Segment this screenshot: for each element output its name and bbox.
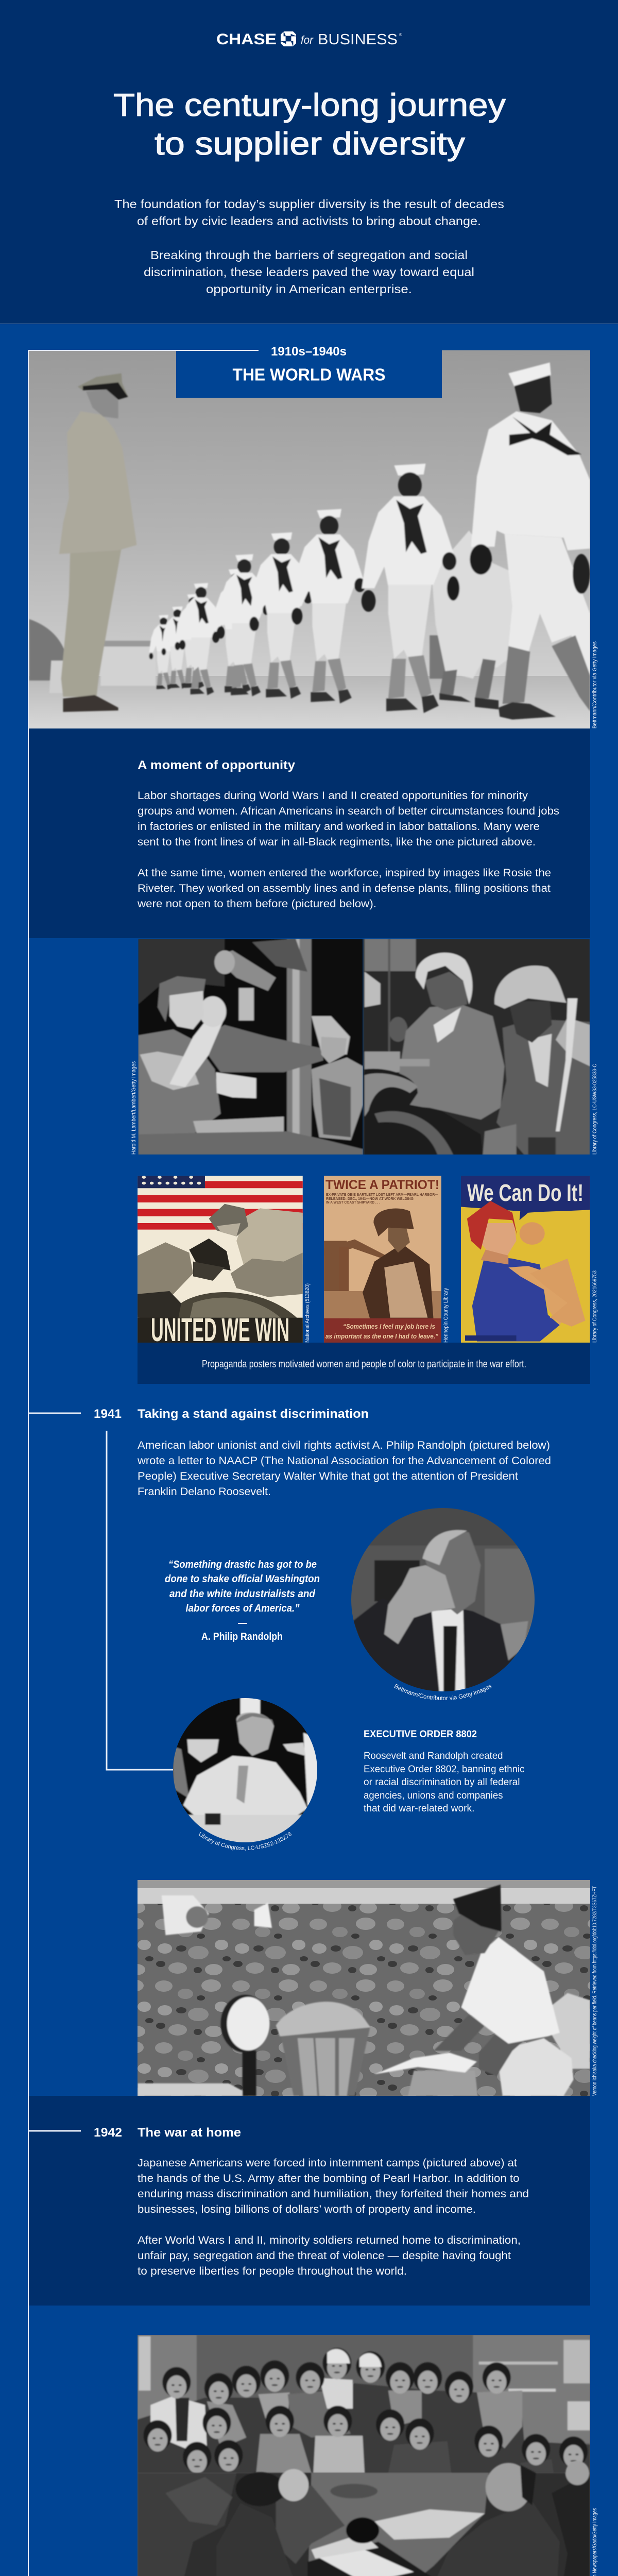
body text: sent to the front lines of war in all-Black regiments, like the one pictured above. [138, 836, 536, 848]
poster: Twice a Patriot [324, 1176, 441, 1343]
body text: 1942: businesses, losing billions of dollars’ worth of property and income. [138, 2204, 476, 2215]
intro text [114, 197, 504, 296]
logo: Chase for Business: ® [399, 32, 402, 37]
quote: Randolph: A. Philip Randolph [201, 1631, 283, 1642]
basket [280, 2025, 370, 2096]
year: 1942: 1942 [94, 2126, 122, 2140]
header panel [0, 0, 618, 324]
credit: farm photo: Vernon Ichisaka checking weight of beans per field. Retrieved from https://doi.org/doi:10.7282/T3S67ZHFT [592, 1886, 598, 2096]
poster text: Twice a Patriot: IN A WEST COAST SHIPYARD . . . [326, 1200, 380, 1205]
intro text: The foundation for today’s supplier diversity is the result of decades [114, 197, 504, 211]
intro text: of effort by civic leaders and activists to bring about change. [137, 214, 481, 228]
intro text: opportunity in American enterprise. [206, 282, 412, 296]
body text: Riveter. They worked on assembly lines and in defense plants, filling positions that [138, 883, 551, 894]
caption panel: propaganda posters: Propaganda posters motivated women and people of color to participate in the war effort. [202, 1359, 526, 1370]
body text: 1942: After World Wars I and II, minority soldiers returned home to discrimination, [138, 2234, 521, 2246]
body text: 1942: the hands of the U.S. Army after the bombing of Pearl Harbor. In addition to [138, 2173, 519, 2184]
body text: groups and women. African Americans in search of better circumstances found jobs [138, 805, 559, 817]
quote: Randolph: labor forces of America.” [185, 1603, 300, 1614]
photo: President Roosevelt signing [169, 1695, 321, 1846]
connector line to FDR photo [107, 1431, 174, 1770]
man [496, 2038, 574, 2096]
photo: sailors marching [29, 350, 590, 728]
text block: Executive Order 8802: EXECUTIVE ORDER 8802 [364, 1729, 477, 1740]
poster text: Twice a Patriot: “Sometimes I feel my job here is [343, 1323, 435, 1330]
body text: 1942: unfair pay, segregation and the threat of violence — despite having fought [138, 2250, 511, 2262]
timeline vertical line [28, 350, 29, 2576]
photo: Japanese American farm worker [138, 1880, 590, 2096]
panel: the war at home [29, 2096, 590, 2306]
caption panel: propaganda posters [138, 1343, 590, 1384]
intro text: discrimination, these leaders paved the way toward equal [144, 265, 474, 279]
year: 1941: 1941 [94, 1407, 122, 1421]
text block: Executive Order 8802: Roosevelt and Randolph created [364, 1751, 503, 1761]
body text: 1941 [137, 1439, 551, 1498]
body text: in factories or enlisted in the military and worked in labor battalions. Many were [138, 821, 540, 833]
quote: Randolph: done to shake official Washington [165, 1573, 320, 1585]
body text: were not open to them before (pictured below). [137, 898, 376, 910]
heading: taking a stand: Taking a stand against discrimination [138, 1407, 369, 1421]
text block: Executive Order 8802: or racial discrimination by all federal [364, 1777, 520, 1788]
poster text: We Can Do It: We Can Do It! [467, 1179, 583, 1206]
hairline above photo [28, 350, 259, 351]
title: to supplier diversity [154, 126, 465, 162]
body text: 1941: wrote a letter to NAACP (The National Association for the Advancement of Colored [137, 1455, 551, 1467]
poster text: Twice a Patriot: TWICE A PATRIOT! [325, 1178, 439, 1192]
text block: Executive Order 8802: Executive Order 8802, banning ethnic [364, 1764, 524, 1775]
body text: 1941: People) Executive Secretary Walter White that got the attention of President [138, 1470, 518, 1482]
photo: A. Philip Randolph [351, 1508, 535, 1691]
title: The century-long journey [113, 88, 506, 123]
photo: National Council of Negro Women [138, 2335, 590, 2576]
body text: Labor shortages during World Wars I and II created opportunities for minority [138, 790, 528, 802]
era dates: 1910s–1940s [271, 345, 347, 359]
title [113, 88, 506, 162]
poster: We Can Do It [461, 1176, 590, 1343]
text block: Executive Order 8802: agencies, unions and companies [364, 1790, 503, 1801]
body text: 1942: to preserve liberties for people throughout the world. [138, 2265, 407, 2277]
credit: poster 3: Library of Congress, 2021669753 [592, 1270, 598, 1343]
quote: Randolph: “Something drastic has got to be [168, 1559, 317, 1570]
poster text: Twice a Patriot: EX-PRIVATE OBIE BARTLETT LOST LEFT ARM—PEARL HARBOR— [326, 1192, 438, 1197]
logo: Chase for Business: for [301, 33, 314, 46]
officer [61, 549, 122, 697]
credit: poster 2: Hennepin County Library [443, 1288, 449, 1343]
credit: workers right: Library of Congress, LC-USW33-025833-C [592, 1064, 598, 1155]
heading: the war at home: The war at home [138, 2126, 241, 2140]
text block: Executive Order 8802: that did war-related work. [364, 1803, 475, 1814]
poster text: United We Win: UNITED WE WIN [151, 1311, 289, 1348]
logo: Chase for Business [216, 31, 402, 48]
quote: Randolph: and the white industrialists and [169, 1588, 316, 1600]
barrel and clipboard [408, 2071, 478, 2096]
logo: Chase for Business: CHASE [216, 31, 277, 48]
body text: At the same time, women entered the workforce, inspired by images like Rosie the [138, 867, 551, 879]
intro text: Breaking through the barriers of segregation and social [150, 248, 468, 262]
era tab [176, 330, 442, 398]
poster text: Twice a Patriot: RELEASED: DEC., 1941—NOW AT WORK WELDING [326, 1196, 414, 1201]
poster text: Twice a Patriot: as important as the one I had to leave.” [325, 1332, 438, 1340]
photo: woman at drill press [139, 939, 363, 1155]
credit: sailors: Bettmann/Contributor via Getty Images [592, 641, 598, 728]
credit: poster 1: National Archives (513820) [304, 1283, 311, 1343]
body text: 1942 [138, 2157, 529, 2277]
big sailor [508, 363, 551, 387]
scale [243, 2051, 256, 2096]
credit: Roosevelt (curved): Library of Congress, LC-USZ62-123278 [199, 1832, 291, 1851]
text block: Executive Order 8802 [364, 1729, 524, 1814]
poster: United We Win [138, 1176, 303, 1343]
body text: 1941: Franklin Delano Roosevelt. [138, 1486, 271, 1498]
body text [137, 790, 559, 910]
poster text: Twice a Patriot [325, 1178, 439, 1340]
logo: Chase for Business: BUSINESS [318, 31, 398, 48]
timeline marker: 1941 [29, 1413, 81, 1414]
body text: 1941: American labor unionist and civil rights activist A. Philip Randolph (pictured below) [138, 1439, 550, 1451]
timeline marker: 1942 [29, 2130, 81, 2132]
body text: 1942: enduring mass discrimination and humiliation, they forfeited their homes and [138, 2188, 529, 2200]
body text: 1942: Japanese Americans were forced into internment camps (pictured above) at [138, 2157, 517, 2169]
panel: a moment of opportunity [29, 728, 590, 938]
era name: THE WORLD WARS [233, 365, 385, 384]
quote: Randolph [165, 1559, 320, 1642]
heading: A moment of opportunity [138, 758, 296, 772]
photo: women shipyard workers [363, 939, 590, 1155]
credit: workers left: Harold M. Lambert/Lambert/Getty Images [131, 1061, 137, 1155]
credit: Randolph (curved): Bettmann/Contributor via Getty Images [394, 1684, 491, 1700]
